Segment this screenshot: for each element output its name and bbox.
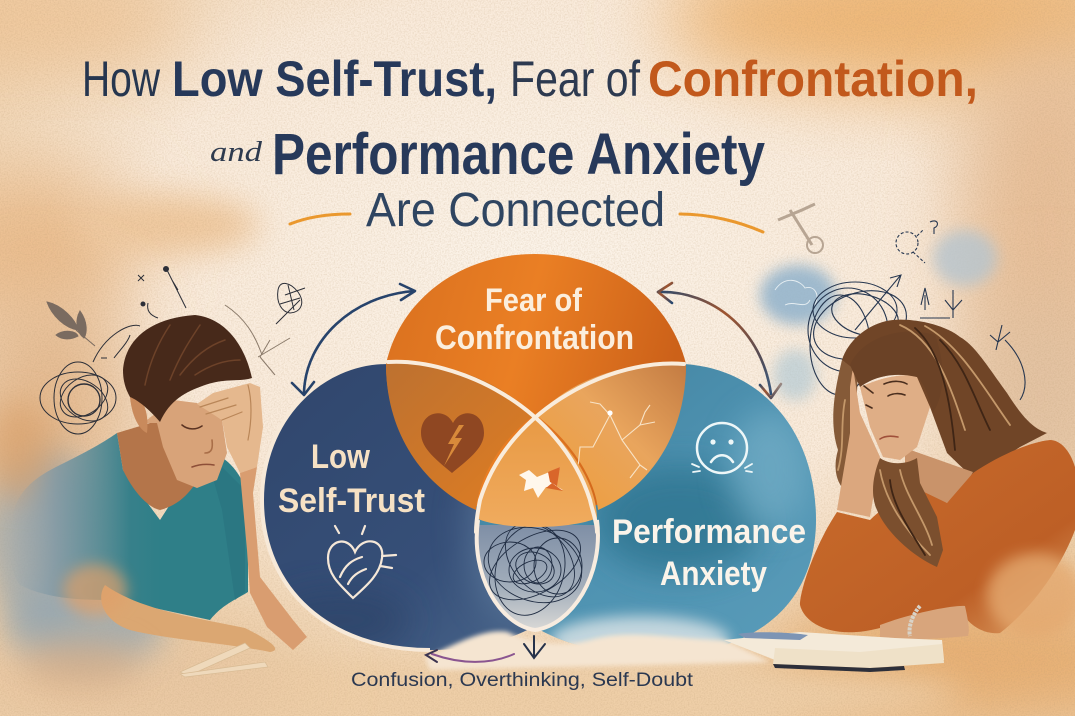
label: low self-trust bbox=[278, 438, 425, 520]
icon: blue blotch near arrow bbox=[773, 349, 817, 401]
woman's hair left side bbox=[833, 360, 858, 490]
overlap: confusion scribble zone bbox=[477, 510, 598, 630]
man's shirt bbox=[9, 433, 248, 620]
circle: fear of confrontation bbox=[386, 254, 686, 518]
title swooshes bbox=[290, 214, 763, 232]
icon: outlined heart bbox=[328, 526, 396, 598]
overlap: fear and performance anxiety bbox=[537, 364, 686, 510]
arrow: down to caption bbox=[524, 636, 545, 658]
icon: leaf sprig bbox=[47, 302, 95, 346]
man's lower arm bbox=[101, 585, 275, 652]
arrow: curved purple to caption bbox=[426, 650, 514, 662]
title line 1 bbox=[82, 51, 978, 107]
man's facial features bbox=[182, 425, 214, 467]
arrow: performance anxiety to fear bbox=[658, 283, 781, 398]
title line 1: Fear of bbox=[510, 51, 640, 107]
label: low self-trust: Self-Trust bbox=[278, 482, 425, 520]
title line 2: Performance Anxiety bbox=[272, 122, 765, 187]
decorative smoke behind the man bbox=[0, 400, 165, 667]
icon: crack lines bbox=[578, 402, 655, 478]
circle: performance anxiety bbox=[476, 363, 816, 664]
woman's back hair bbox=[842, 320, 1047, 478]
head scribble bbox=[804, 275, 916, 395]
title line 1: Low Self-Trust, bbox=[172, 51, 497, 107]
label: low self-trust: Low bbox=[311, 438, 370, 476]
pencil / paper on the table bbox=[180, 643, 268, 677]
man's face bbox=[143, 400, 227, 488]
man's hair strands bbox=[145, 325, 240, 385]
icon: faded pin sketch bbox=[778, 204, 823, 253]
icon: central burst bbox=[519, 467, 563, 498]
woman's sweater bbox=[800, 440, 1075, 633]
illustration: stressed man bbox=[9, 315, 307, 689]
overlap: fear and low self-trust bbox=[386, 364, 533, 510]
arrow: low self-trust to fear bbox=[292, 284, 415, 395]
woman's neck bbox=[905, 448, 973, 503]
man's raised hand bbox=[197, 383, 263, 473]
circle: low self-trust bbox=[260, 360, 527, 652]
icon: heart with lightning bolt bbox=[421, 413, 484, 473]
circle dividing white arcs bbox=[388, 362, 684, 532]
left doodles bbox=[40, 266, 305, 434]
illustration: stressed woman bbox=[724, 320, 1075, 672]
label: performance anxiety: Performance bbox=[612, 513, 806, 551]
icon: scribble ball bbox=[40, 362, 116, 434]
right doodles bbox=[760, 204, 1025, 401]
man's hair bbox=[123, 315, 252, 422]
venn diagram bbox=[262, 254, 816, 670]
woman's brows and eyes bbox=[864, 381, 907, 439]
icon: question mark bbox=[930, 221, 937, 234]
title line 1: Confrontation, bbox=[648, 51, 978, 107]
woman's face bbox=[860, 375, 930, 460]
icon: tangled scribble bbox=[478, 510, 592, 623]
small arrows bbox=[921, 288, 1010, 350]
label: fear of confrontation bbox=[435, 282, 634, 357]
man's finger lines bbox=[200, 385, 251, 440]
open book bbox=[724, 632, 944, 672]
title line 1: How bbox=[82, 51, 161, 107]
label: fear of confrontation: Confrontation bbox=[435, 319, 634, 357]
title bbox=[82, 51, 978, 237]
man's ear bbox=[130, 396, 147, 433]
icon: cracked watercolour blotch bbox=[760, 265, 836, 325]
orange smoke on sweater bbox=[987, 553, 1075, 637]
man's forearm bbox=[240, 467, 307, 650]
icon: blue blotch upper right bbox=[933, 230, 997, 286]
label: fear of confrontation: Fear of bbox=[485, 282, 582, 318]
icon: leaf scribble bbox=[276, 283, 305, 324]
icon: sad face bbox=[692, 423, 752, 473]
woman's front hair lock bbox=[873, 458, 943, 567]
man's shirt dark folds bbox=[205, 450, 245, 600]
title line 2: and bbox=[210, 137, 263, 168]
man's neck bbox=[117, 420, 207, 510]
label: performance anxiety: Anxiety bbox=[660, 555, 767, 593]
icon: question scribble bbox=[896, 229, 925, 263]
orange smoke over arm bbox=[20, 564, 140, 689]
watercolour fade at base of circles bbox=[425, 631, 770, 670]
woman's lower arm and bracelet bbox=[880, 606, 969, 639]
woman's hand on head bbox=[837, 367, 880, 517]
caption: Confusion, Overthinking, Self-Doubt bbox=[351, 670, 694, 691]
icon: small doodles bbox=[93, 325, 140, 362]
overlap: centre of all three bbox=[476, 418, 597, 527]
title line 3: Are Connected bbox=[366, 184, 665, 237]
woman's front hair top bbox=[850, 332, 943, 412]
woman's hair strands bbox=[838, 325, 1010, 555]
label: performance anxiety bbox=[612, 513, 806, 593]
